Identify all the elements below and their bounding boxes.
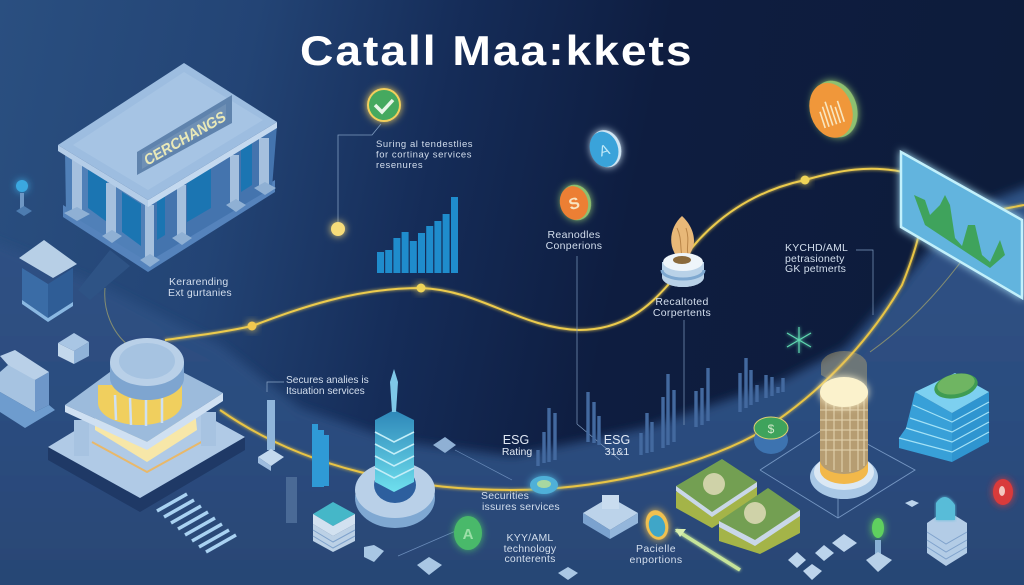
star sparkle xyxy=(787,327,811,353)
small office block xyxy=(19,240,77,322)
tower with disc xyxy=(355,369,435,528)
blue stepped stack with coin xyxy=(899,370,989,462)
cash stack 1 xyxy=(676,459,757,528)
cash stack 2 xyxy=(719,488,800,554)
cube platform xyxy=(583,495,638,539)
label: securities: Securities xyxy=(481,490,529,502)
label: secures: Itsuation services xyxy=(286,386,365,397)
small chip xyxy=(433,437,456,453)
label: kyc: KYCHD/AML xyxy=(785,242,848,254)
small bowl coin xyxy=(754,417,788,454)
label: pacielle: Pacielle xyxy=(636,543,676,555)
callout connector xyxy=(338,124,381,225)
server stack xyxy=(927,497,967,566)
small cubes right group xyxy=(788,500,919,580)
yellow market path lower xyxy=(220,205,1024,490)
crosswalk stripes xyxy=(157,494,236,552)
label: kyc technology: conterents xyxy=(504,553,556,565)
callout text: top: for cortinay services xyxy=(376,150,472,160)
small bowl coin: $ xyxy=(768,422,775,436)
node dots xyxy=(248,176,810,330)
faded bars xyxy=(538,358,783,466)
label: esg: 31&1 xyxy=(605,446,629,458)
label: recaltoted: Corpertents xyxy=(653,307,711,319)
label: kyc technology: KYY/AML xyxy=(507,532,553,544)
stacked block xyxy=(313,502,355,552)
connector xyxy=(577,256,684,460)
column with connector xyxy=(258,382,284,471)
icon: blue coin xyxy=(585,126,626,172)
connector xyxy=(856,250,873,315)
callout text: top: Suring al tendestlies xyxy=(376,139,473,150)
faint connector lines on floor xyxy=(398,450,512,556)
small cubes left group xyxy=(364,545,578,580)
icon: lamp xyxy=(16,180,32,216)
label: pacielle: enportions xyxy=(629,554,683,566)
building: domed institution xyxy=(48,338,245,512)
windows xyxy=(88,141,252,246)
yellow market path upper xyxy=(165,169,903,340)
label: esg rating: ESG xyxy=(503,433,529,447)
machine xyxy=(0,350,55,428)
icon: small disc xyxy=(530,476,558,494)
label: kyc: GK petmerts xyxy=(785,263,846,275)
label: securities: issures services xyxy=(482,501,560,513)
label: secures: Secures analies is xyxy=(286,375,369,386)
isometric floor xyxy=(0,180,1024,585)
bar chart xyxy=(377,197,458,273)
icon: orange dollar coin: S xyxy=(567,195,582,214)
label: kyc technology: technology xyxy=(504,543,557,555)
label: esg rating: Rating xyxy=(502,446,532,458)
icon: teal coin with arrow xyxy=(642,508,740,570)
monitor panel xyxy=(901,152,1022,298)
dark column xyxy=(286,477,297,523)
callout text: top: resenures xyxy=(376,160,423,171)
label: left: Kerarending xyxy=(169,276,228,288)
icon: red pin xyxy=(993,479,1013,505)
columns xyxy=(72,138,269,263)
building: exchange xyxy=(58,63,277,272)
thin orbit lines xyxy=(105,180,985,352)
label: kyc: petrasionety xyxy=(785,253,845,265)
circuit outline xyxy=(760,425,915,518)
steps by exchange xyxy=(78,250,130,300)
sign text: CERCHANGS xyxy=(142,108,228,170)
title: Catall Maa:kkets xyxy=(300,28,692,75)
sign xyxy=(137,95,232,175)
green lamp xyxy=(866,518,892,572)
icon: flame on disc xyxy=(662,216,704,287)
icon: orange chart coin xyxy=(802,75,865,144)
box xyxy=(58,333,89,364)
golden cylinder tower xyxy=(810,351,878,499)
label: reanodles: Conperions xyxy=(546,240,602,252)
icon: blue coin: A xyxy=(597,141,612,160)
label: esg: ESG xyxy=(604,433,630,447)
label: recaltoted: Recaltoted xyxy=(655,296,709,308)
icon: check badge xyxy=(367,88,401,122)
icon: green badge xyxy=(454,516,482,550)
label: reanodles: Reanodles xyxy=(548,229,600,241)
blue bars xyxy=(312,424,329,487)
label: left: Ext gurtanies xyxy=(168,287,232,299)
icon: green badge: A xyxy=(463,526,474,543)
roof xyxy=(58,145,148,207)
icon: orange dollar coin xyxy=(556,181,595,224)
